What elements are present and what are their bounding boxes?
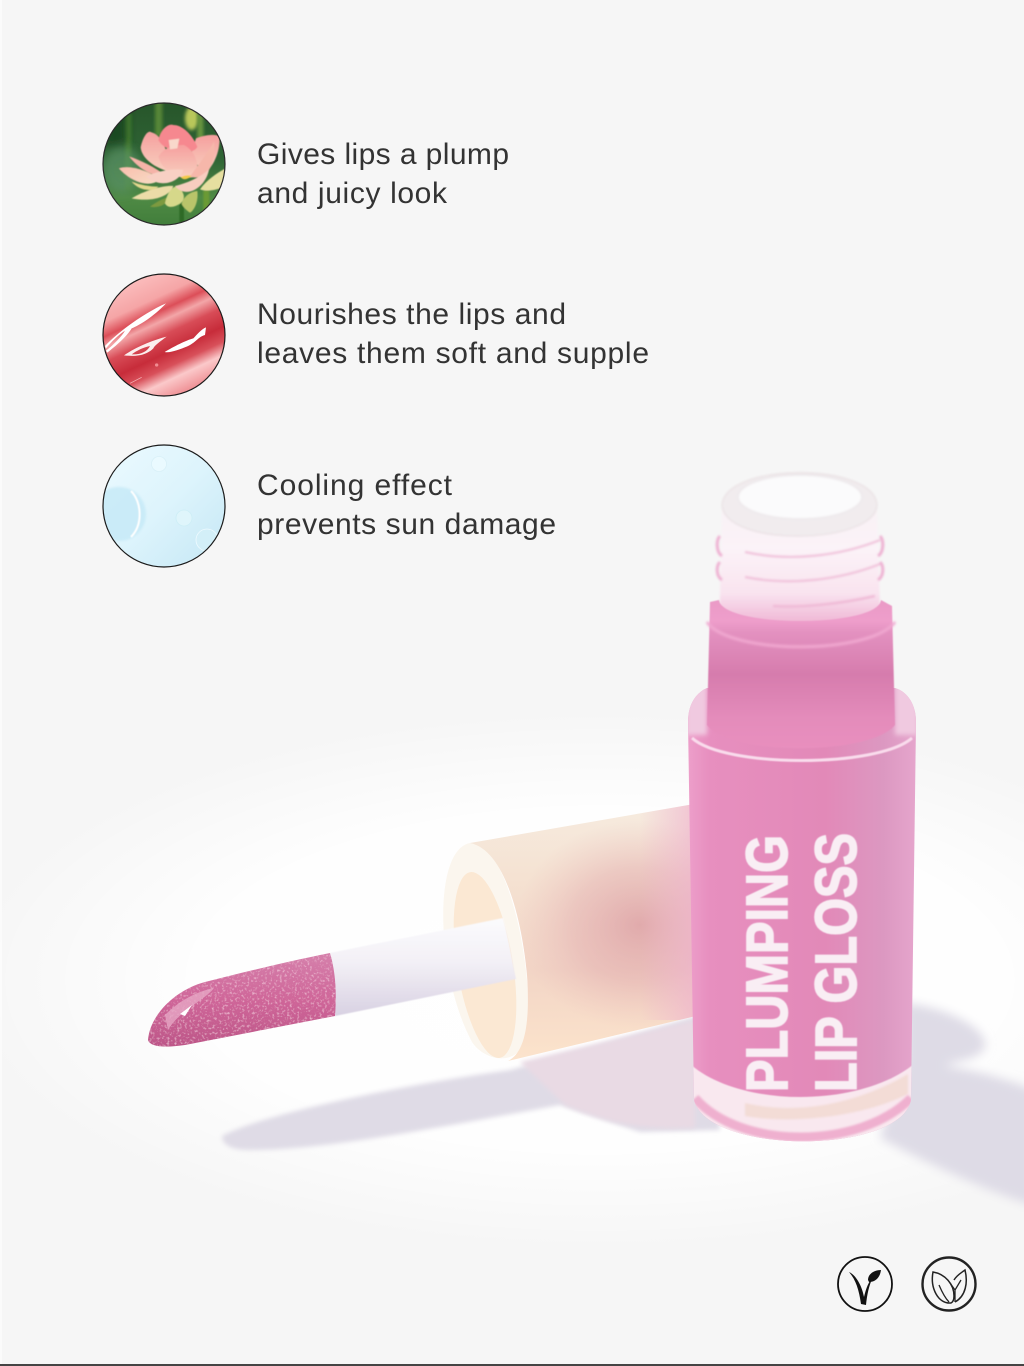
- bottom rule: [0, 1364, 1024, 1366]
- benefit 3: text: Cooling effect: [257, 469, 453, 502]
- benefit 2: swatch ring: [103, 274, 225, 396]
- bottle body: [686, 680, 918, 1160]
- bottle collar: [707, 600, 895, 748]
- benefit 1: lotus ring: [103, 103, 225, 225]
- benefit 2: gloss swatch: [104, 274, 224, 396]
- benefit 1: text: [257, 138, 509, 210]
- product label text: LIP GLOSS: [804, 833, 869, 1092]
- bottle neck: [717, 473, 883, 640]
- benefit 3: text: [257, 469, 556, 541]
- white tabletop glow: [0, 710, 1024, 1250]
- cap inner and rim: [443, 843, 528, 1058]
- product label text: PLUMPING: [735, 835, 800, 1092]
- lip gloss wand and cap: [148, 804, 693, 1061]
- benefit 1: text: and juicy look: [257, 177, 448, 210]
- cap body: [470, 804, 693, 1061]
- benefit 1: text: Gives lips a plump: [257, 138, 509, 171]
- wand applicator: [148, 953, 336, 1047]
- shadows on table: [222, 1003, 1024, 1206]
- icon: vegan: [838, 1257, 892, 1311]
- bottle body highlight rim: [692, 738, 912, 760]
- benefit 3: water ring: [103, 445, 225, 567]
- benefit 2: text: Nourishes the lips and: [257, 298, 566, 331]
- benefit 3: text: prevents sun damage: [257, 508, 556, 541]
- benefit 3: water swatch: [104, 446, 224, 566]
- wand stem: [330, 918, 516, 1016]
- product label text: [735, 833, 869, 1092]
- lip gloss bottle: [686, 473, 918, 1160]
- benefit 2: text: [257, 298, 649, 370]
- benefit 2: text: leaves them soft and supple: [257, 337, 649, 370]
- benefit 1: lotus image: [104, 104, 224, 224]
- icon: natural leaves: [922, 1258, 976, 1310]
